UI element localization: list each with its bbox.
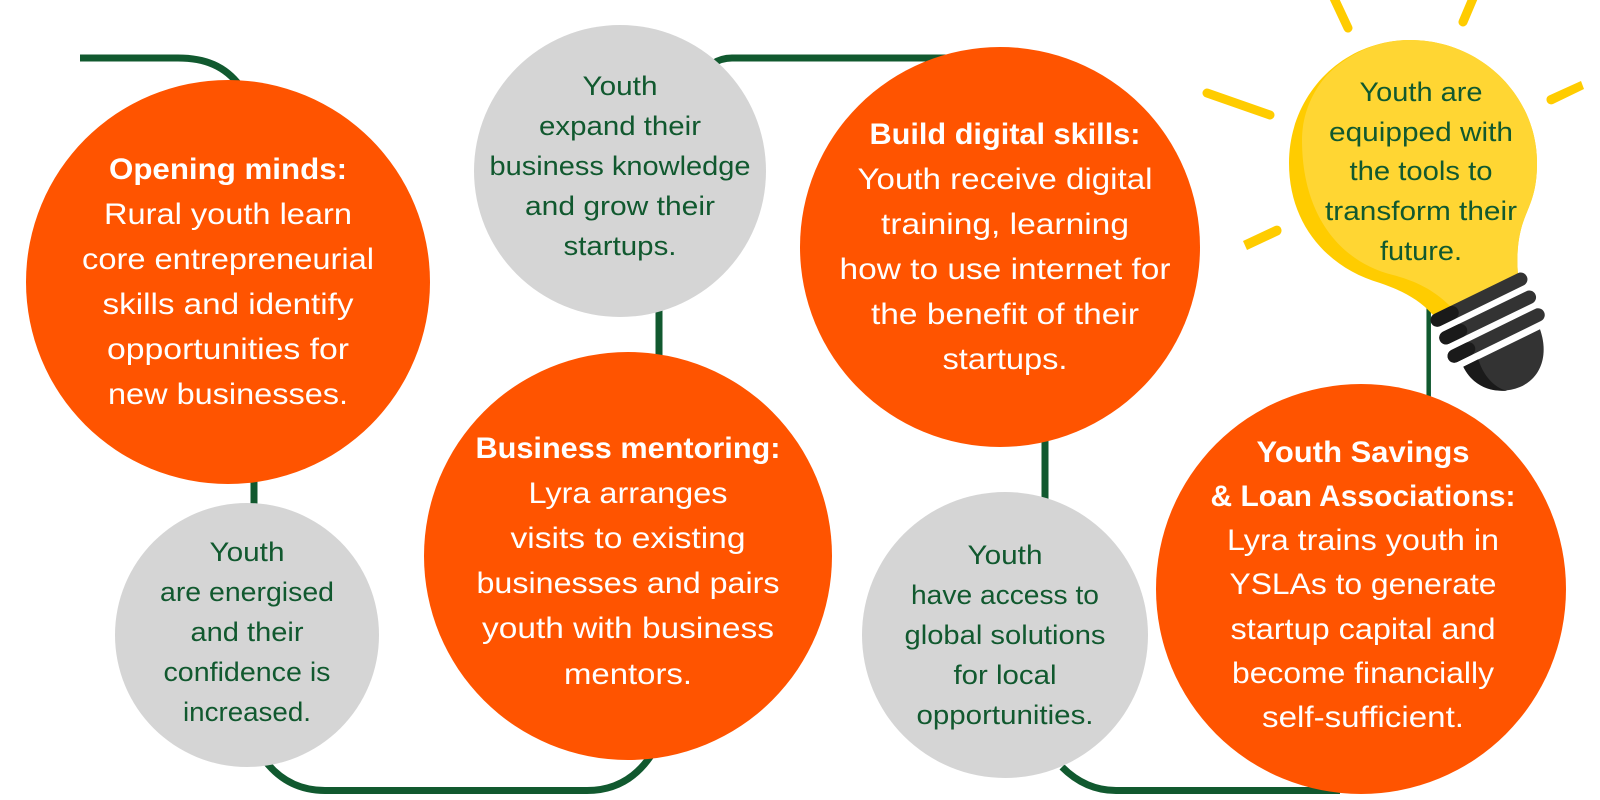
panel: global solutions: for local [954, 660, 1056, 690]
panel: opening minds: core entrepreneurial [82, 243, 374, 276]
panel: opening minds: new businesses. [108, 378, 348, 411]
panel: business mentoring: mentors. [564, 658, 692, 691]
panel: opening minds [26, 80, 430, 484]
icon: light bulb rays [1207, 0, 1584, 250]
panel: youth expand knowledge [474, 25, 766, 317]
panel: youth expand knowledge: startups. [564, 231, 676, 261]
panel: opening minds: Rural youth learn [104, 198, 352, 231]
panel: business mentoring: Lyra arranges [528, 477, 728, 510]
connecting path [80, 58, 1429, 790]
panel: business mentoring [424, 352, 832, 760]
panel: opening minds: Opening minds: [109, 153, 347, 186]
bulb text: Youth are [1360, 77, 1482, 107]
panel: youth savings and loan associations: become financially [1232, 657, 1494, 690]
panel: global solutions: Youth [968, 540, 1042, 570]
panel: youth savings and loan associations: & Loan Associations: [1210, 480, 1516, 513]
panel: youth energised [115, 503, 379, 767]
bulb text [1325, 77, 1517, 266]
panel: global solutions: global solutions [904, 620, 1106, 650]
panel: youth energised: confidence is [164, 657, 330, 687]
panel: business mentoring: youth with business [482, 612, 774, 645]
panel: youth savings and loan associations: YSLAs to generate [1230, 568, 1496, 601]
panel: youth savings and loan associations: self-sufficient. [1262, 701, 1464, 734]
panel: youth expand knowledge: business knowledge [490, 151, 750, 181]
panel: business mentoring: businesses and pairs [476, 567, 780, 600]
panel: build digital skills: Youth receive digital [858, 163, 1152, 196]
bulb text: the tools to [1350, 156, 1492, 186]
panel: youth expand knowledge: expand their [539, 111, 701, 141]
panel: global solutions: opportunities. [916, 700, 1094, 730]
bulb text: equipped with [1329, 117, 1513, 147]
panel: business mentoring: Business mentoring: [476, 432, 780, 465]
panel: opening minds: skills and identify [102, 288, 354, 321]
panel: youth energised: Youth [210, 537, 284, 567]
panel: build digital skills: the benefit of their [871, 298, 1139, 331]
panel: build digital skills: how to use internet for [840, 253, 1171, 286]
panel: build digital skills [800, 47, 1200, 447]
panel: youth expand knowledge: and grow their [525, 191, 715, 221]
panel: youth energised: and their [190, 617, 304, 647]
icon: bulb screw base [1437, 279, 1544, 391]
panel: build digital skills: Build digital skills: [870, 118, 1140, 151]
panel: youth savings and loan associations: Youth Savings [1256, 436, 1470, 469]
panel: global solutions: have access to [911, 580, 1099, 610]
panel: build digital skills: startups. [942, 343, 1068, 376]
panel: youth energised: increased. [183, 697, 311, 727]
panel: youth expand knowledge: Youth [582, 71, 658, 101]
icon: light bulb [1289, 40, 1544, 391]
panel: youth savings and loan associations: Lyra trains youth in [1227, 524, 1499, 557]
panel: business mentoring: visits to existing [510, 522, 746, 555]
panel: opening minds: opportunities for [107, 333, 349, 366]
panel: build digital skills: training, learning [881, 208, 1129, 241]
panel: youth energised: are energised [160, 577, 334, 607]
bulb text: future. [1380, 236, 1462, 266]
panel: youth savings and loan associations [1156, 384, 1566, 794]
panel: global solutions [862, 492, 1148, 778]
panel: youth savings and loan associations: startup capital and [1230, 613, 1496, 646]
bulb text: transform their [1325, 196, 1517, 226]
